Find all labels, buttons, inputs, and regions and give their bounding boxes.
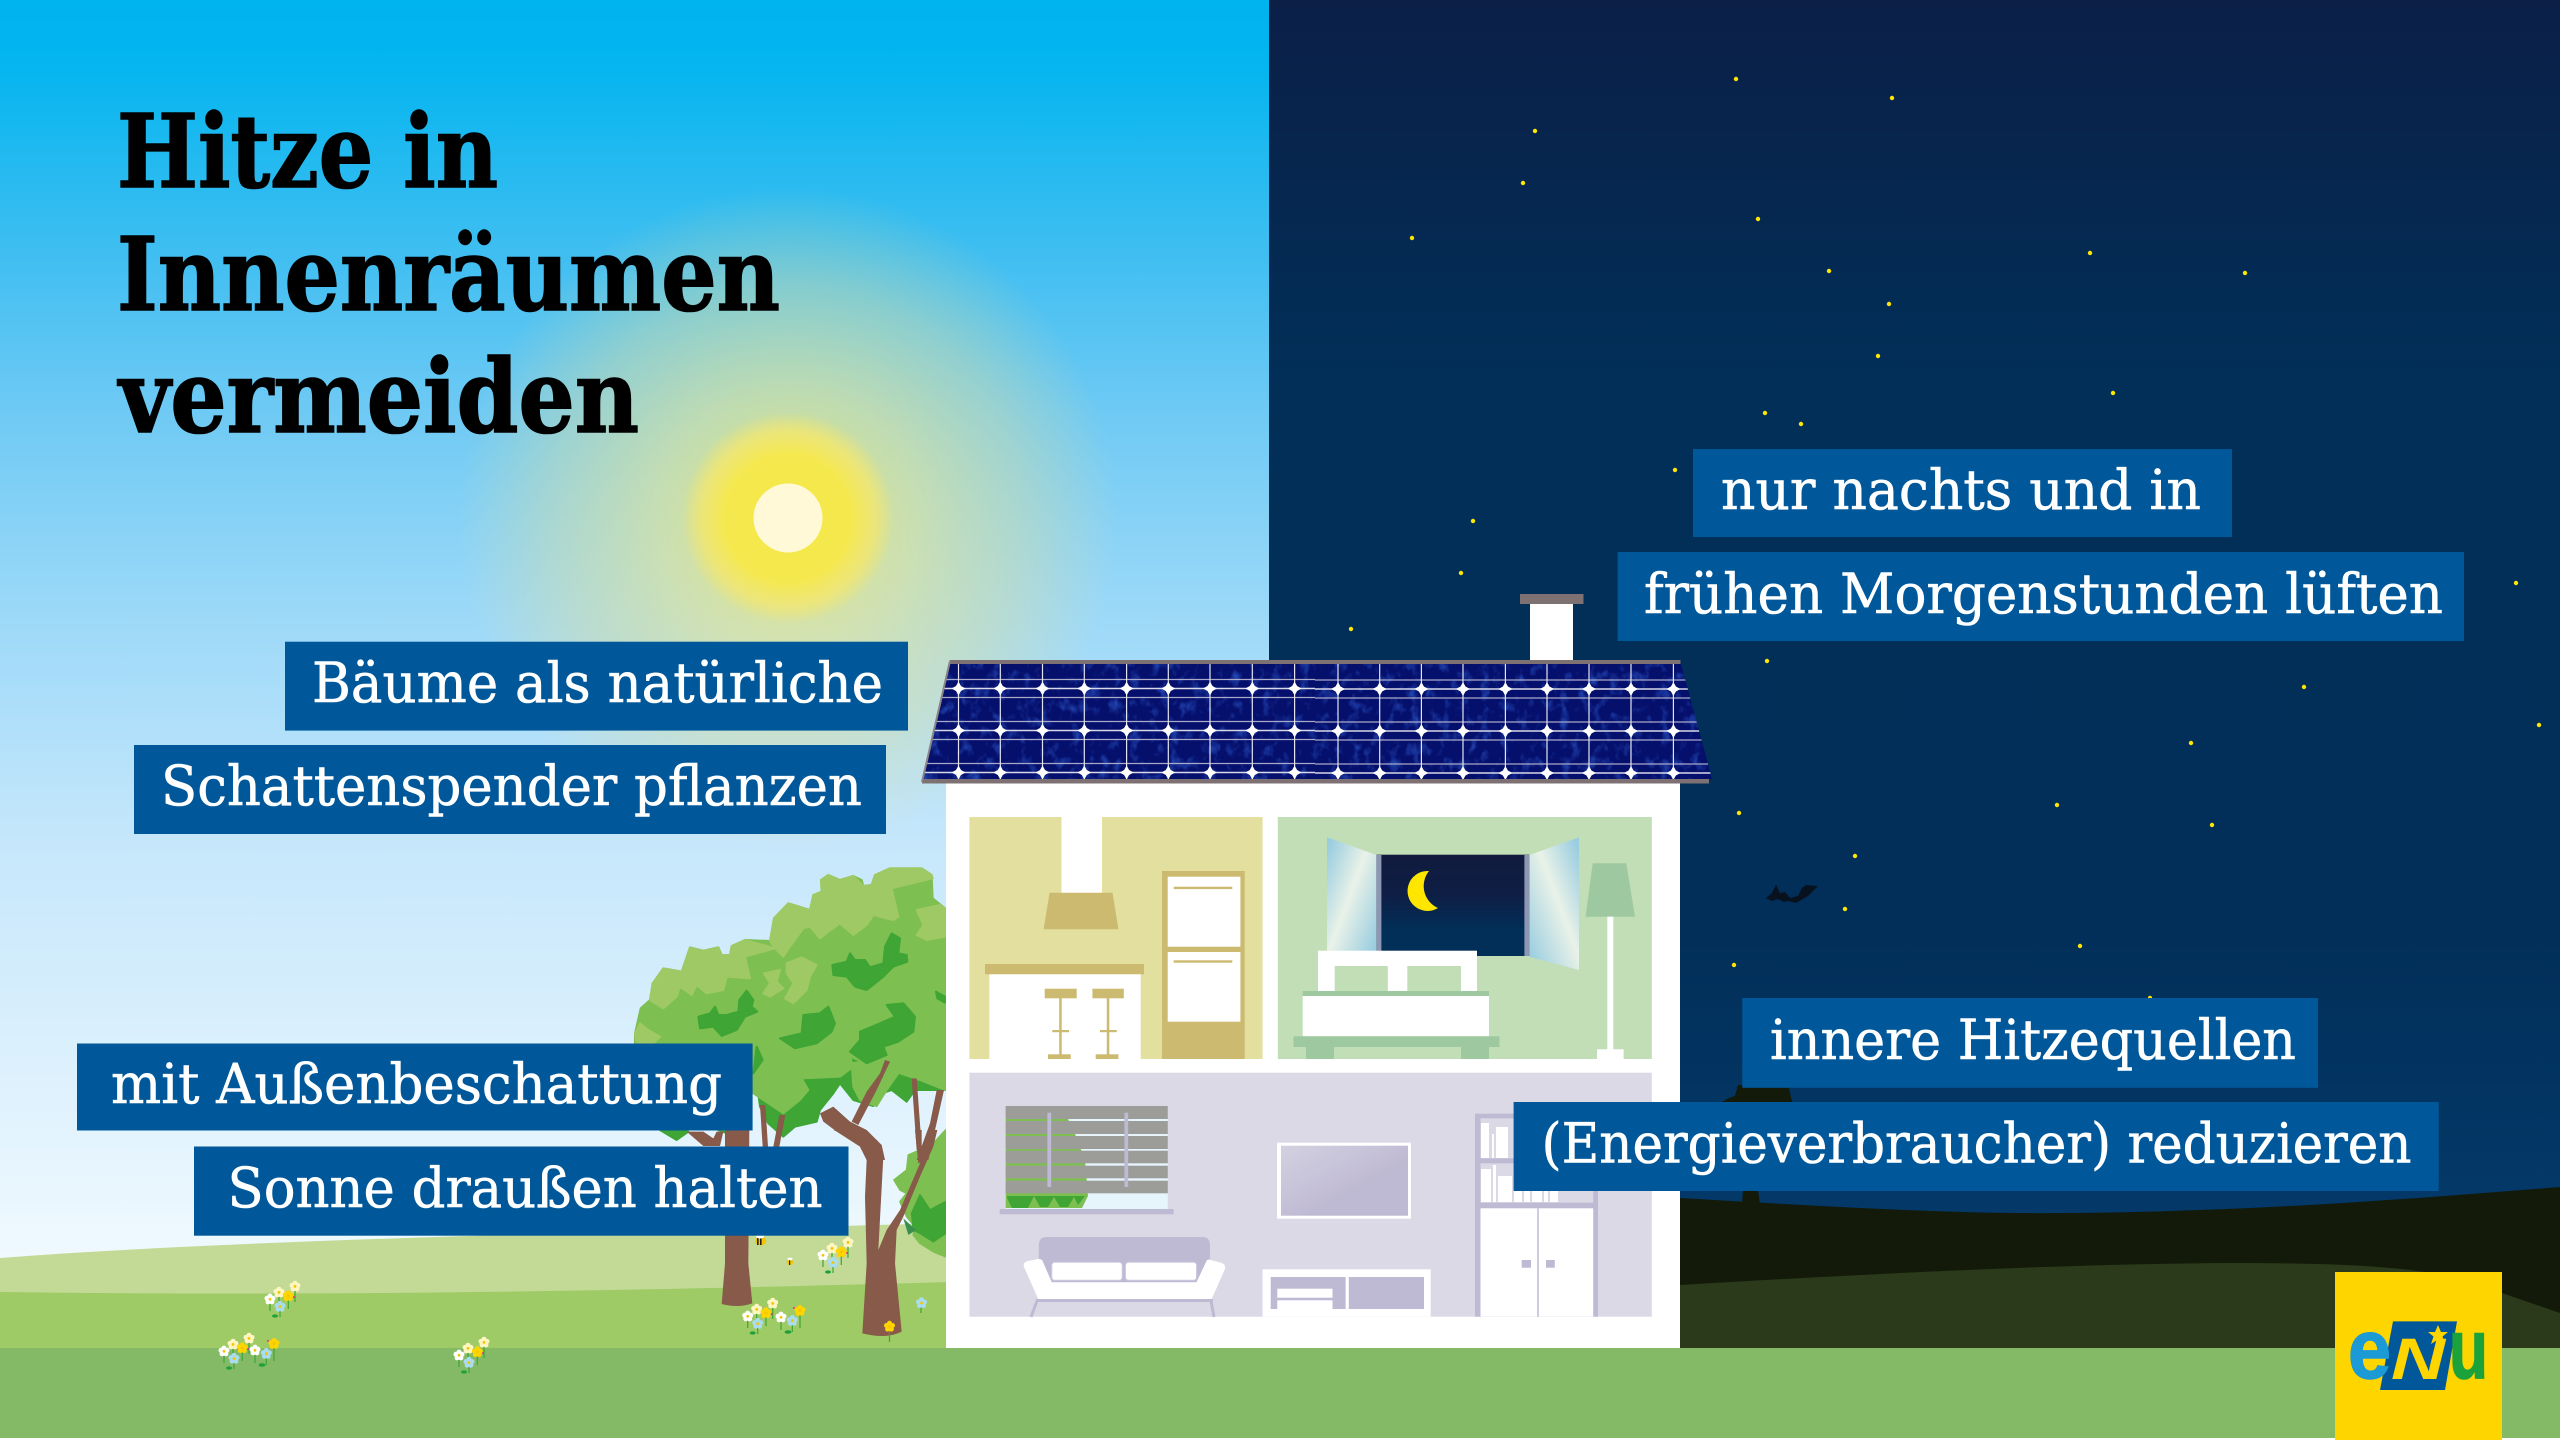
label: reduce internal heat sources: innere Hitzequellen — [1770, 1008, 2296, 1072]
title: vermeiden — [117, 337, 639, 456]
label: reduce internal heat sources — [1514, 998, 2439, 1191]
label: trees as shade: Bäume als natürliche — [312, 651, 883, 715]
day front hill — [0, 1282, 950, 1350]
night front hill — [1680, 1263, 2560, 1350]
room: bedroom — [1278, 817, 1652, 1059]
TV stand — [1263, 1269, 1431, 1317]
framed picture — [1277, 1143, 1411, 1219]
ground — [0, 1348, 2560, 1438]
window with blinds — [1000, 1106, 1174, 1214]
tree trunks — [722, 1130, 937, 1336]
flowers — [218, 1237, 927, 1374]
room: kitchen — [969, 817, 1263, 1059]
bed — [1294, 951, 1500, 1059]
night tree silhouette — [1714, 1085, 1795, 1204]
house body — [946, 783, 1680, 1348]
day back hill — [0, 1223, 950, 1300]
title: Hitze in — [117, 92, 498, 211]
canopy dark foliage — [698, 933, 945, 1073]
title: Innenräumen — [117, 215, 780, 334]
stars — [1349, 77, 2541, 1000]
background: night sky — [1269, 0, 2560, 1350]
label: external shading: mit Außenbeschattung — [111, 1052, 722, 1116]
logo: eNu: u — [2449, 1302, 2488, 1396]
icon: bat — [1766, 885, 1818, 903]
canopy light foliage — [635, 868, 945, 1043]
label: external shading — [77, 1044, 848, 1236]
label: trees as shade — [134, 642, 908, 834]
room: living room — [969, 1073, 1652, 1317]
night back hill — [1680, 1187, 2560, 1350]
logo: eNu: N — [2391, 1327, 2446, 1392]
upper branches — [687, 1060, 944, 1160]
label: ventilate at night: frühen Morgenstunden lüften — [1644, 562, 2443, 626]
canopy body — [635, 868, 945, 1113]
chimney — [1520, 594, 1584, 661]
bees — [755, 1234, 793, 1265]
tree: small right tree — [894, 1130, 946, 1257]
sun with glow — [480, 200, 1096, 810]
logo: eNu: e — [2348, 1302, 2391, 1396]
logo: eNu — [2335, 1272, 2502, 1440]
sofa — [1024, 1237, 1225, 1317]
open window at night — [1327, 837, 1579, 970]
bookshelf and cabinet — [1475, 1114, 1598, 1317]
label: external shading: Sonne draußen halten — [228, 1156, 822, 1220]
solar roof — [900, 658, 1740, 784]
house — [900, 594, 1740, 1348]
label: ventilate at night: nur nachts und in — [1721, 458, 2201, 522]
label: ventilate at night — [1618, 449, 2464, 641]
title — [117, 92, 780, 456]
background: day sky — [0, 0, 1269, 1350]
label: trees as shade: Schattenspender pflanzen — [161, 754, 862, 818]
floor lamp — [1586, 863, 1635, 1059]
tree: left and right canopy — [635, 868, 945, 1160]
label: reduce internal heat sources: (Energieverbraucher) reduzieren — [1542, 1112, 2412, 1176]
